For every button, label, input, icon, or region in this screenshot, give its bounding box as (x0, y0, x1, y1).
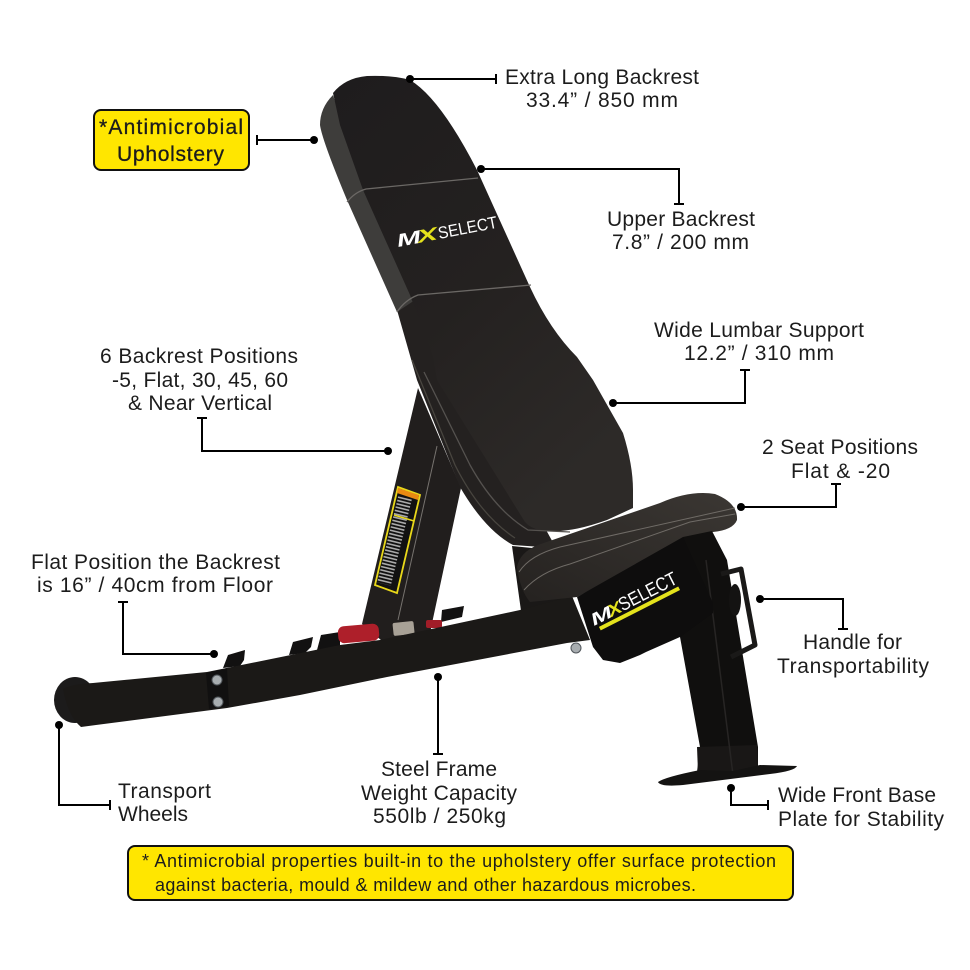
label: flat position: is 16” / 40cm from Floor (37, 574, 273, 597)
label: handle: Transportability (777, 655, 930, 678)
frame joint (206, 668, 229, 709)
label: front base plate: Wide Front Base (778, 784, 936, 807)
leader: steel frame (433, 673, 443, 754)
label: extra long backrest (505, 66, 699, 112)
label: seat positions: 2 Seat Positions (762, 436, 918, 459)
backrest pad (333, 76, 633, 531)
rear upright support (362, 388, 461, 646)
leader: upper backrest (477, 165, 684, 204)
transport handle (721, 569, 755, 657)
leader: wide lumbar support (609, 370, 750, 407)
label: wide lumbar support: 12.2” / 310 mm (684, 342, 834, 365)
footnote callout (128, 846, 793, 900)
label: backrest positions: & Near Vertical (128, 392, 272, 415)
red pin rear (426, 620, 442, 628)
label: flat position (31, 551, 280, 597)
leader: transport wheels (55, 721, 110, 810)
bench illustration (54, 76, 797, 786)
label: handle (777, 631, 930, 678)
label: wide lumbar support (654, 319, 864, 365)
footnote callout: * Antimicrobial properties built-in to the upholstery offer surface protection (142, 851, 776, 871)
adjustment tabs (223, 606, 464, 668)
label: seat positions (762, 436, 918, 483)
label: extra long backrest: Extra Long Backrest (505, 66, 699, 89)
label: steel frame: Steel Frame (381, 758, 497, 781)
label: transport wheels (118, 780, 211, 826)
label: transport wheels: Transport (118, 780, 211, 803)
leader: seat positions (737, 484, 841, 511)
front leg (680, 531, 758, 775)
leader: flat position (118, 602, 218, 658)
label: front base plate: Plate for Stability (778, 808, 944, 831)
bracket logo: M (587, 602, 617, 630)
callout: antimicrobial upholstery: *Antimicrobial (99, 116, 243, 139)
red pin (337, 623, 380, 644)
footnote callout: against bacteria, mould & mildew and other hazardous microbes. (155, 875, 696, 895)
label: steel frame: 550lb / 250kg (373, 805, 506, 828)
base plate (658, 765, 797, 786)
seat cushion (517, 493, 737, 602)
bolts (212, 568, 697, 707)
main frame rail (63, 596, 590, 727)
label: upper backrest (607, 208, 755, 254)
leader: front base plate (727, 784, 768, 810)
rear support highlight (398, 446, 437, 620)
backrest side rim lower (397, 295, 556, 548)
leader: backrest positions (197, 418, 392, 455)
label: steel frame (361, 758, 518, 828)
label: handle: Handle for (803, 631, 902, 654)
seat support post (512, 546, 570, 642)
backrest logo: M (395, 226, 424, 251)
warning sticker (375, 487, 420, 593)
backrest logo: X (414, 223, 441, 247)
handle knob (729, 584, 741, 616)
label: upper backrest: 7.8” / 200 mm (612, 231, 749, 254)
leader: antimicrobial (257, 135, 318, 145)
leader: extra long backrest (406, 74, 496, 84)
backrest seams (347, 178, 570, 538)
backrest side rim upper (320, 95, 418, 312)
beige pin (392, 621, 415, 636)
backrest logo (395, 212, 499, 251)
label: extra long backrest: 33.4” / 850 mm (526, 89, 678, 112)
bracket logo: SELECT (615, 568, 681, 616)
label: backrest positions: 6 Backrest Positions (100, 345, 298, 368)
leg collar (697, 745, 758, 775)
label: transport wheels: Wheels (118, 803, 188, 826)
label: seat positions: Flat & -20 (791, 460, 890, 483)
rear wheel (54, 677, 96, 723)
callout: antimicrobial upholstery (94, 110, 249, 170)
leader: handle (756, 595, 848, 629)
seat seams (519, 508, 735, 590)
bracket logo: X (603, 597, 627, 621)
label: steel frame: Weight Capacity (361, 782, 518, 805)
label: wide lumbar support: Wide Lumbar Support (654, 319, 864, 342)
label: front base plate (778, 784, 944, 831)
bracket plate (577, 537, 713, 663)
label: flat position: Flat Position the Backrest (31, 551, 280, 574)
label: upper backrest: Upper Backrest (607, 208, 755, 231)
label: backrest positions (100, 345, 298, 415)
backrest logo: SELECT (436, 213, 499, 243)
label: backrest positions: -5, Flat, 30, 45, 60 (112, 369, 288, 392)
leg ridge (706, 560, 733, 775)
bracket logo (587, 568, 682, 632)
callout: antimicrobial upholstery: Upholstery (117, 143, 224, 166)
